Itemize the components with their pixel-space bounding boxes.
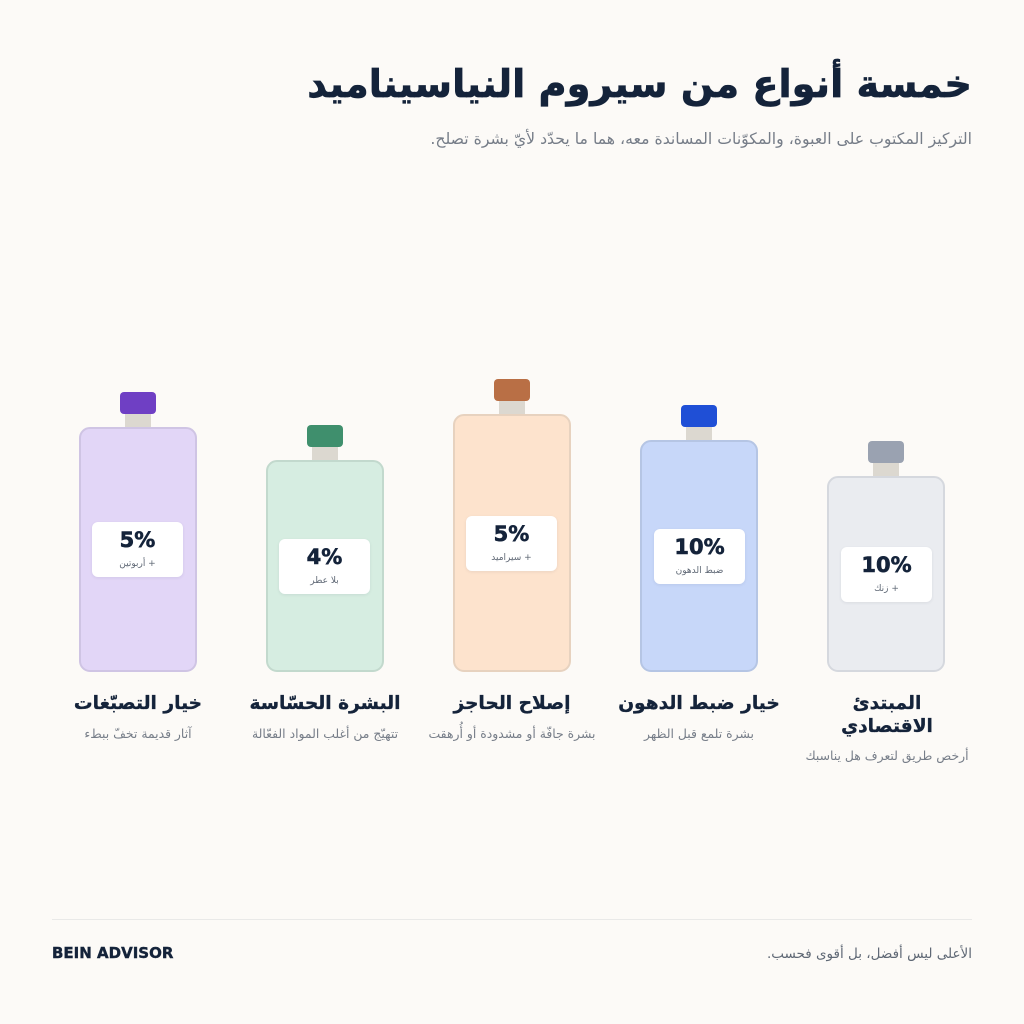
neck	[873, 463, 899, 477]
name: المبتدئ	[853, 693, 921, 714]
caption: oil control	[618, 693, 780, 741]
neck	[499, 401, 525, 415]
description: تتهيّج من أغلب المواد الفعّالة	[252, 726, 398, 741]
bottle body	[79, 427, 197, 672]
cap	[681, 405, 717, 427]
name: الاقتصادي	[841, 716, 933, 737]
name: البشرة الحسّاسة	[249, 693, 401, 714]
neck	[125, 414, 151, 428]
cap	[307, 425, 343, 447]
bottle: budget starter	[827, 441, 945, 672]
title: خمسة أنواع من سيروم النياسيناميد	[307, 62, 972, 107]
footer rule	[52, 919, 972, 920]
ingredient: + أربوتين	[119, 559, 156, 569]
neck	[312, 447, 338, 461]
name: إصلاح الحاجز	[453, 693, 571, 714]
bottle body	[453, 414, 571, 672]
ingredient: بلا عطر	[310, 576, 339, 586]
concentration: 5%	[494, 522, 529, 546]
bottle: barrier repair	[453, 379, 571, 672]
caption: barrier repair	[429, 693, 595, 741]
concentration: 5%	[120, 528, 155, 552]
neck	[686, 427, 712, 441]
bottle body	[266, 460, 384, 672]
ingredient: ضبط الدهون	[676, 566, 723, 576]
description: بشرة تلمع قبل الظهر	[644, 726, 754, 741]
subtitle: التركيز المكتوب على العبوة، والمكوّنات المساندة معه، هما ما يحدّد لأيّ بشرة تصلح.	[430, 129, 972, 148]
label card	[466, 516, 557, 571]
bottle: pigmentation option	[79, 392, 197, 672]
name: خيار التصبّغات	[74, 693, 202, 714]
caption: budget starter	[805, 693, 969, 763]
footer note: الأعلى ليس أفضل، بل أقوى فحسب.	[767, 946, 972, 962]
caption: sensitive skin	[249, 693, 401, 741]
label card	[841, 547, 932, 602]
bottle body	[827, 476, 945, 672]
ingredient: + زنك	[874, 584, 899, 594]
cap	[868, 441, 904, 463]
label card	[92, 522, 183, 577]
concentration: 10%	[861, 553, 912, 577]
label card	[654, 529, 745, 584]
ingredient: + سيراميد	[491, 553, 532, 563]
concentration: 4%	[307, 545, 342, 569]
description: بشرة جافّة أو مشدودة أو أُرهقت	[429, 726, 595, 741]
brand: BEIN ADVISOR	[52, 944, 173, 962]
cap	[494, 379, 530, 401]
name: خيار ضبط الدهون	[618, 693, 780, 714]
label card	[279, 539, 370, 594]
bottle: oil control	[640, 405, 758, 672]
description: آثار قديمة تخفّ ببطء	[84, 726, 192, 741]
concentration: 10%	[674, 535, 725, 559]
name	[841, 693, 933, 737]
cap	[120, 392, 156, 414]
description: أرخص طريق لتعرف هل يناسبك	[805, 748, 969, 763]
caption: pigmentation option	[74, 693, 202, 741]
bottle body	[640, 440, 758, 672]
bottle: sensitive skin	[266, 425, 384, 672]
